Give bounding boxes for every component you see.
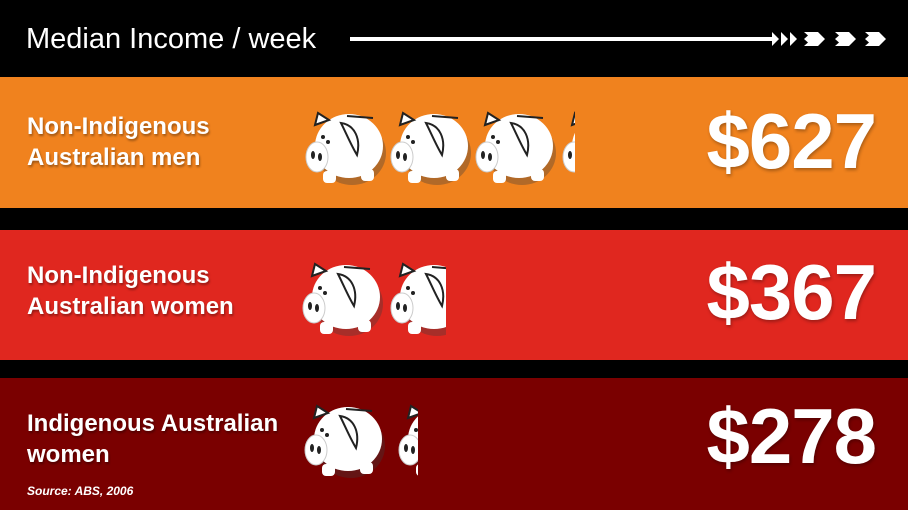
panel: indigenous women <box>0 378 908 510</box>
panel: non-indigenous women <box>0 230 908 360</box>
panel: non-indigenous men <box>0 77 908 208</box>
icons: piggy banks women <box>302 262 446 336</box>
label: women: Australian women <box>27 293 234 320</box>
header title: Median Income / week <box>26 23 316 55</box>
header bar <box>0 0 908 77</box>
label: indigenous women: women <box>27 441 110 468</box>
value: $627: $627 <box>706 97 876 185</box>
label: men: Australian men <box>27 144 200 171</box>
label: women: Non-Indigenous <box>27 262 210 289</box>
label: men: Non-Indigenous <box>27 113 210 140</box>
icons: piggy banks men <box>306 111 575 185</box>
label: indigenous women <box>26 410 278 468</box>
header arrow <box>350 32 886 46</box>
label: women <box>27 262 234 320</box>
value: $367: $367 <box>706 248 876 336</box>
label: men <box>27 113 211 171</box>
source note: Source: ABS, 2006 <box>27 484 133 498</box>
value: $278: $278 <box>706 392 876 480</box>
icons: piggy banks indigenous <box>304 404 418 478</box>
label: indigenous women: Indigenous Australian <box>27 410 278 437</box>
